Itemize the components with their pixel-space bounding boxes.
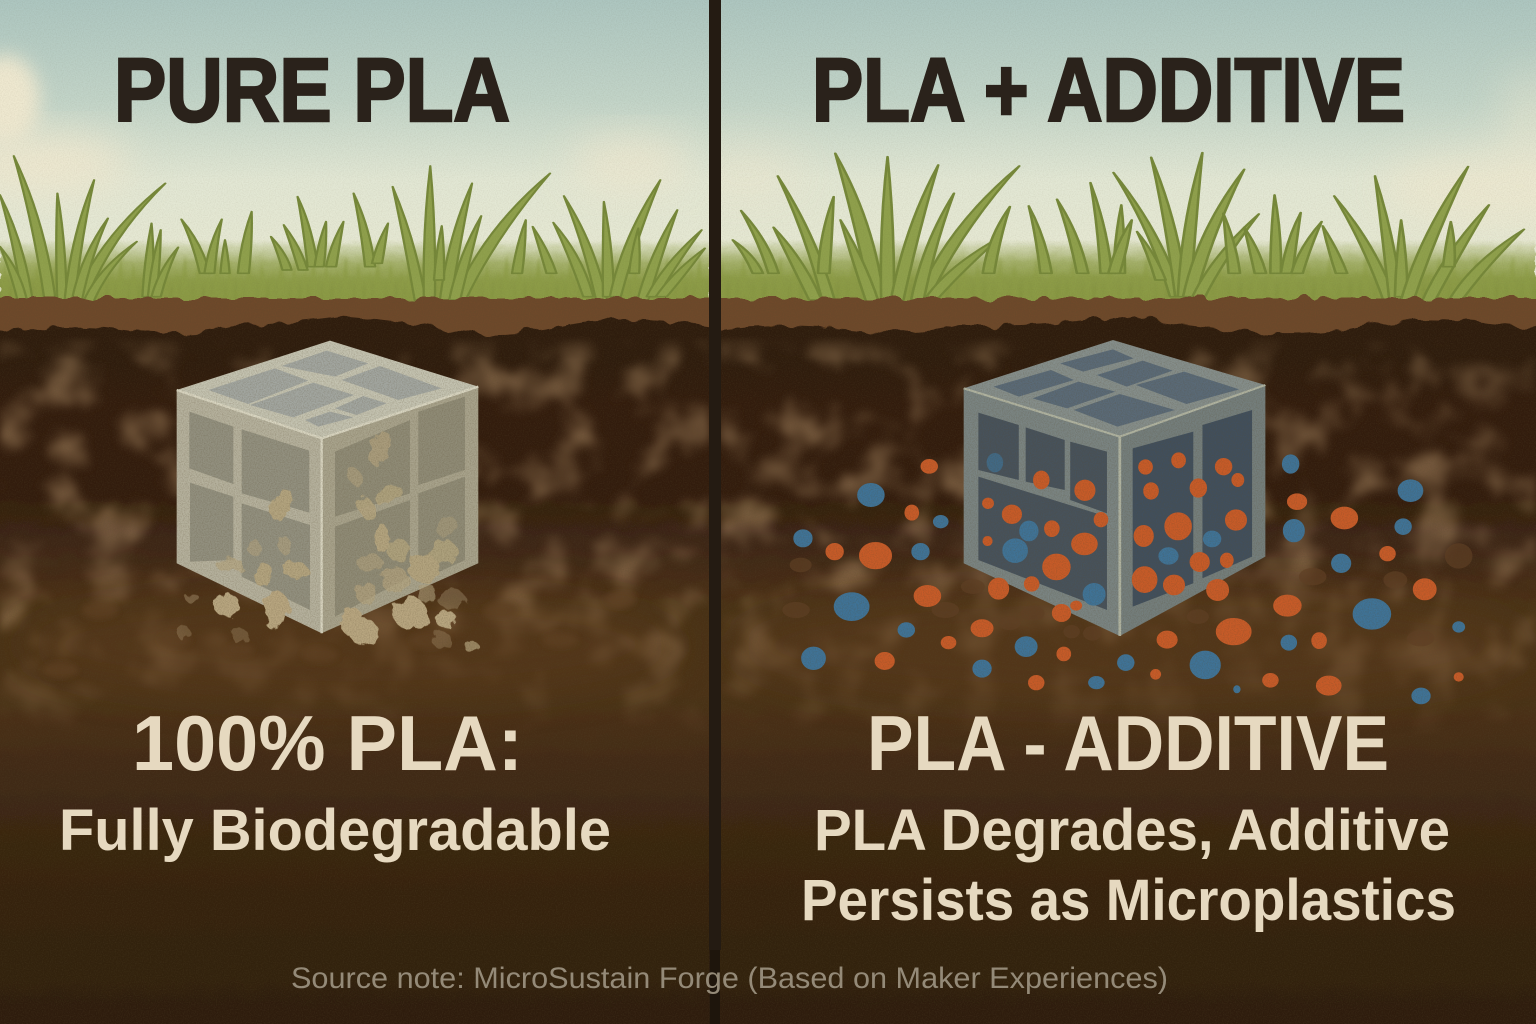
caption: PLA degrades line: PLA Degrades, Additive bbox=[814, 798, 1450, 863]
cube right face bbox=[1120, 385, 1265, 636]
cube edge highlights bbox=[964, 385, 1265, 636]
center divider bbox=[709, 0, 721, 1024]
source note: Source note: MicroSustain Forge (Based on Maker Experiences) bbox=[291, 962, 1168, 995]
topsoil band bbox=[0, 295, 709, 337]
clouds bbox=[0, 55, 690, 195]
grass bbox=[716, 153, 1536, 303]
caption: fully biodegradable: Fully Biodegradable bbox=[59, 798, 611, 863]
clouds bbox=[1427, 74, 1536, 198]
blue additive particles bbox=[795, 454, 1464, 703]
cube: pure PLA, degrading bbox=[177, 341, 480, 651]
cube top face bbox=[177, 341, 478, 438]
cube edge highlights bbox=[177, 387, 478, 633]
title: PLA + additive: PLA + ADDITIVE bbox=[812, 41, 1405, 141]
grain overlay: soil bbox=[0, 300, 1536, 1024]
degraded crumbs bbox=[216, 429, 460, 605]
deep soil bbox=[0, 316, 709, 939]
grass bbox=[0, 156, 709, 307]
caption: PLA - additive: PLA - ADDITIVE bbox=[867, 699, 1389, 787]
cube left face bbox=[177, 390, 322, 633]
deep soil bbox=[710, 316, 1536, 1024]
cube and particles: PLA + additive bbox=[782, 340, 1472, 703]
panel: PLA + additive bbox=[721, 0, 1536, 940]
orange additive particles bbox=[827, 453, 1462, 695]
title: pure PLA: PURE PLA bbox=[114, 41, 510, 141]
caption: 100% PLA: 100% PLA: bbox=[132, 699, 523, 787]
sky bbox=[0, 0, 709, 300]
crumbs spilled on soil bbox=[177, 589, 480, 651]
topsoil band bbox=[721, 294, 1536, 336]
panel: pure PLA bbox=[0, 0, 720, 1024]
cube top face bbox=[964, 340, 1265, 437]
cube left face bbox=[964, 388, 1120, 636]
cube right face bbox=[322, 387, 478, 633]
caption: persists line: Persists as Microplastics bbox=[801, 868, 1456, 933]
sky bbox=[720, 0, 1536, 300]
soil mounds bbox=[782, 543, 1472, 646]
grain overlay: sky bbox=[0, 0, 1536, 300]
